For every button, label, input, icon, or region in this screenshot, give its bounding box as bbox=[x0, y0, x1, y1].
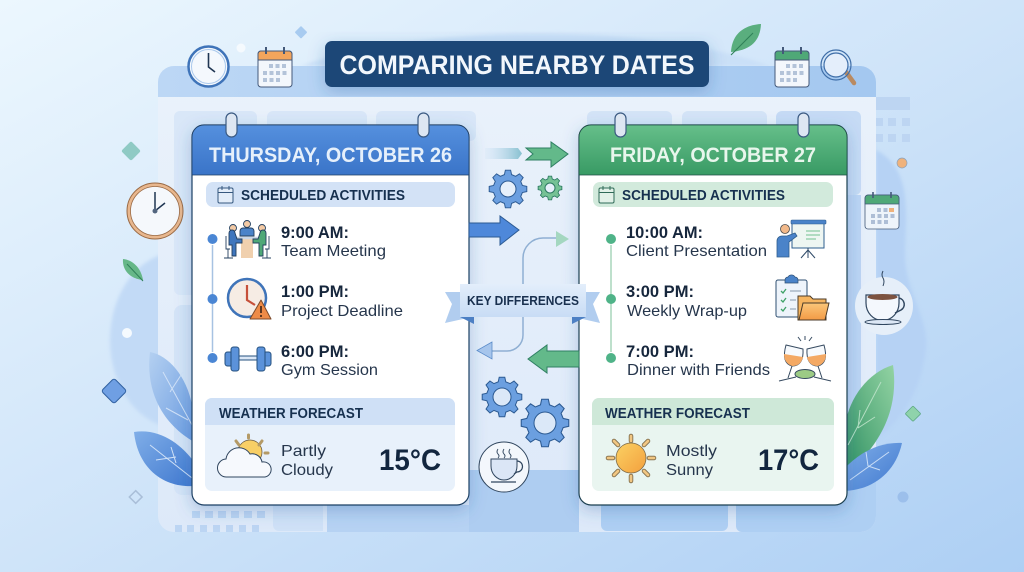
Friday activity 2 name: Weekly Wrap-up bbox=[627, 303, 747, 320]
Thursday timeline bbox=[208, 234, 218, 363]
arrow: green left bbox=[528, 345, 579, 373]
Thursday header bbox=[192, 113, 469, 175]
Friday activity 2: 3:00 PM: bbox=[626, 283, 694, 301]
calendar backdrop frame bbox=[158, 66, 876, 532]
leaves left bbox=[134, 352, 194, 486]
icon: team meeting bbox=[224, 220, 271, 258]
background blobs bbox=[110, 33, 926, 440]
Friday weather: WEATHER FORECAST bbox=[605, 406, 750, 422]
Thursday header: THURSDAY, OCTOBER 26 bbox=[209, 144, 452, 167]
icon: presentation bbox=[777, 220, 826, 258]
Thursday weather: Cloudy bbox=[281, 462, 333, 479]
ribbon: key differences: KEY DIFFERENCES bbox=[467, 293, 579, 308]
Friday activity 3 name: Dinner with Friends bbox=[627, 362, 770, 379]
arrow: top fade bbox=[485, 148, 522, 159]
Thursday activity 2: 1:00 PM: bbox=[281, 283, 349, 301]
icon: calendar right side bbox=[865, 192, 899, 229]
Thursday activity 3 name: Gym Session bbox=[281, 362, 378, 379]
Thursday activity 1 name: Team Meeting bbox=[281, 243, 386, 260]
icon: calendar green top bbox=[775, 47, 809, 87]
Friday header: FRIDAY, OCTOBER 27 bbox=[610, 144, 816, 167]
icon: sun bbox=[608, 436, 654, 481]
Thursday weather: 15°C bbox=[379, 444, 441, 477]
ribbon: key differences bbox=[445, 284, 600, 324]
icon: wine glasses bbox=[779, 336, 831, 381]
icon: gear blue lower left bbox=[482, 377, 522, 417]
Friday activity 1 name: Client Presentation bbox=[626, 243, 767, 260]
icon: gear blue lower right bbox=[521, 399, 569, 447]
leaf top bbox=[731, 24, 761, 55]
icon: coffee cup right bbox=[855, 271, 913, 335]
icon: deadline clock bbox=[228, 279, 271, 319]
arrow: thin connector up bbox=[523, 231, 569, 284]
arrow: top green right bbox=[526, 142, 568, 167]
icon: wall clock small bbox=[188, 46, 228, 86]
title bbox=[325, 41, 709, 87]
Thursday activity 1: 9:00 AM: bbox=[281, 224, 349, 242]
Friday weather bbox=[592, 398, 834, 491]
panel: Friday bbox=[579, 113, 847, 505]
icon: large wall clock bbox=[127, 183, 183, 239]
icon: magnifier bbox=[821, 50, 854, 83]
icon: gear blue top bbox=[489, 170, 527, 208]
Thursday activity 2 name: Project Deadline bbox=[281, 303, 403, 320]
Thursday activities heading: SCHEDULED ACTIVITIES bbox=[241, 188, 405, 204]
icon: gear green bbox=[538, 176, 562, 200]
icon: calendar orange bbox=[258, 47, 292, 87]
title: COMPARING NEARBY DATES bbox=[340, 50, 694, 80]
icon: partly cloudy bbox=[217, 435, 271, 477]
panel: Thursday bbox=[192, 113, 469, 505]
decorative dots and diamonds bbox=[101, 26, 921, 503]
Thursday weather: WEATHER FORECAST bbox=[219, 406, 363, 422]
Friday activities heading: SCHEDULED ACTIVITIES bbox=[622, 188, 785, 204]
Thursday activities heading bbox=[206, 182, 455, 207]
Friday weather: 17°C bbox=[758, 444, 819, 477]
leaf left small bbox=[123, 259, 143, 281]
Friday activity 3: 7:00 PM: bbox=[626, 343, 694, 361]
Friday timeline bbox=[606, 234, 616, 363]
leaves right bbox=[845, 365, 902, 491]
Friday weather: Mostly bbox=[666, 443, 717, 460]
arrow: blue right bbox=[469, 216, 519, 245]
Thursday activity 3: 6:00 PM: bbox=[281, 343, 349, 361]
Thursday weather bbox=[205, 398, 455, 491]
Friday weather: Sunny bbox=[666, 462, 713, 479]
Friday header bbox=[579, 113, 847, 175]
icon: coffee cup centre bbox=[479, 442, 529, 492]
Thursday weather: Partly bbox=[281, 443, 326, 460]
arrow: thin connector down bbox=[477, 316, 523, 359]
icon: dumbbell bbox=[225, 347, 271, 371]
Friday activity 1: 10:00 AM: bbox=[626, 224, 703, 242]
Friday activities heading bbox=[593, 182, 833, 207]
icon: checklist and folder bbox=[776, 275, 829, 320]
